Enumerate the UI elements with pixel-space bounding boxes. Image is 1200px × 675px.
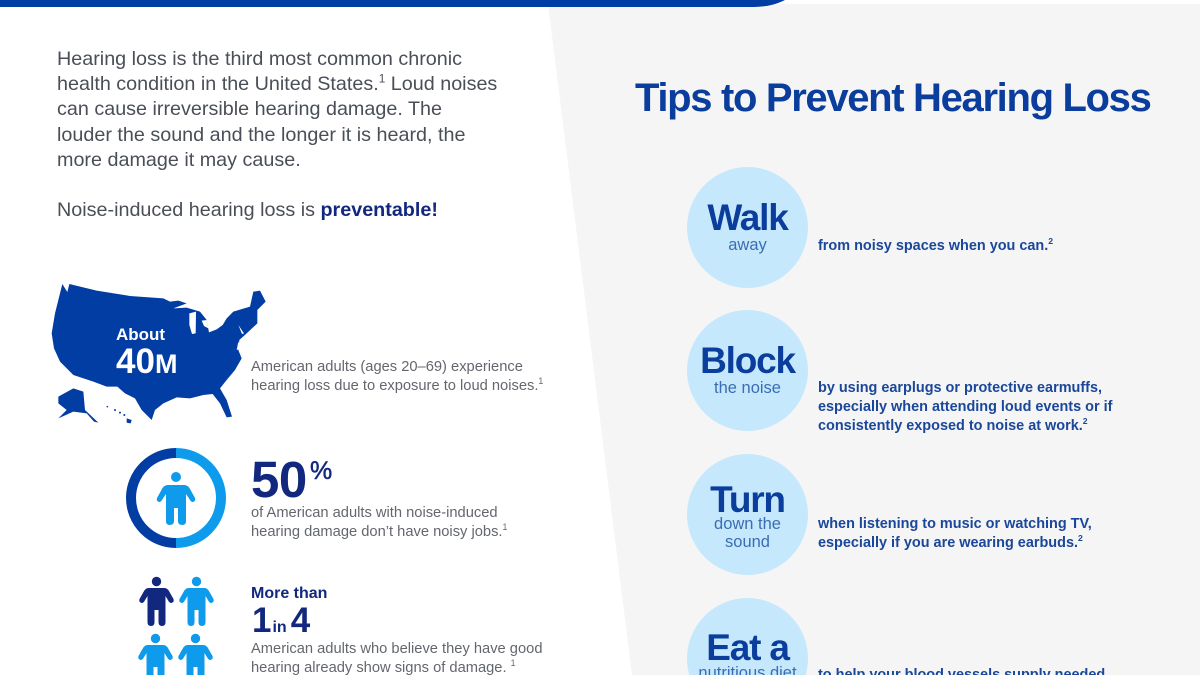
stat: more than label: More than (251, 585, 327, 602)
intro text: health condition in the United States.1 Loud noises (57, 72, 497, 95)
map label: about 40M (116, 325, 177, 381)
circle: turn: Turn (710, 479, 785, 520)
stat: 40 million text: American adults (ages 20–69) experience (251, 359, 523, 375)
stat: 50 percent number: % (310, 457, 332, 485)
circle: block: the noise (714, 379, 781, 397)
tip: turn down the sound (687, 454, 1092, 575)
heading: eat a: Eat a (706, 627, 789, 668)
stat: 40 million text (251, 359, 543, 394)
tip: walk away (687, 167, 1053, 288)
tip text: turn (818, 516, 1092, 551)
stat: 1 in 4 text (251, 641, 542, 675)
intro text: Hearing loss is the third most common chronic (57, 48, 462, 70)
circle: walk: Walk (707, 197, 788, 238)
icon: four people (138, 576, 214, 675)
stat: 1 in 4 text: American adults who believe they have good (251, 641, 542, 657)
circle: turn: sound (725, 533, 770, 551)
preventable statement: Noise-induced hearing loss is preventable! (57, 199, 438, 221)
intro text: can cause irreversible hearing damage. The (57, 98, 442, 120)
map label: about 40M: 40M (116, 342, 177, 381)
tip text: turn: especially if you are wearing earbuds.2 (818, 533, 1083, 551)
tip: eat a nutritious diet (687, 598, 1105, 675)
title: Tips to Prevent Hearing Loss (635, 76, 1150, 120)
circle: eat (687, 598, 808, 675)
tip: block the noise (687, 310, 1112, 434)
tip text: walk: from noisy spaces when you can.2 (818, 236, 1053, 254)
stat: 50 percent number: 50 (251, 451, 307, 508)
top header bar (0, 0, 785, 7)
intro text (57, 48, 497, 171)
circle: walk (687, 167, 808, 288)
stat: 50 percent text: hearing damage don’t have noisy jobs.1 (251, 522, 507, 540)
circle: turn: down the (714, 515, 781, 533)
stat: 50 percent text: of American adults with noise-induced (251, 505, 498, 521)
tip text: block (818, 380, 1112, 434)
intro text: more damage it may cause. (57, 149, 301, 171)
stat: 1 in 4: 1in4 (252, 601, 310, 640)
stat: 50 percent text (251, 505, 507, 540)
intro text: louder the sound and the longer it is heard, the (57, 124, 465, 146)
stat: 50 percent number (251, 451, 332, 508)
icon: ring with person (126, 448, 226, 548)
circle: turn (687, 454, 808, 575)
tip text: turn: when listening to music or watching TV, (818, 516, 1092, 532)
map label: about 40M: About (116, 325, 165, 344)
circle: walk: away (728, 236, 767, 254)
stat: 40 million text: hearing loss due to exposure to loud noises.1 (251, 376, 543, 394)
circle: block: Block (700, 340, 795, 381)
tip text: block: especially when attending loud events or if (818, 399, 1112, 415)
tip text: block: by using earplugs or protective earmuffs, (818, 380, 1102, 396)
tip text: block: consistently exposed to noise at work.2 (818, 416, 1088, 434)
icon: US map (52, 284, 266, 424)
circle: block (687, 310, 808, 431)
